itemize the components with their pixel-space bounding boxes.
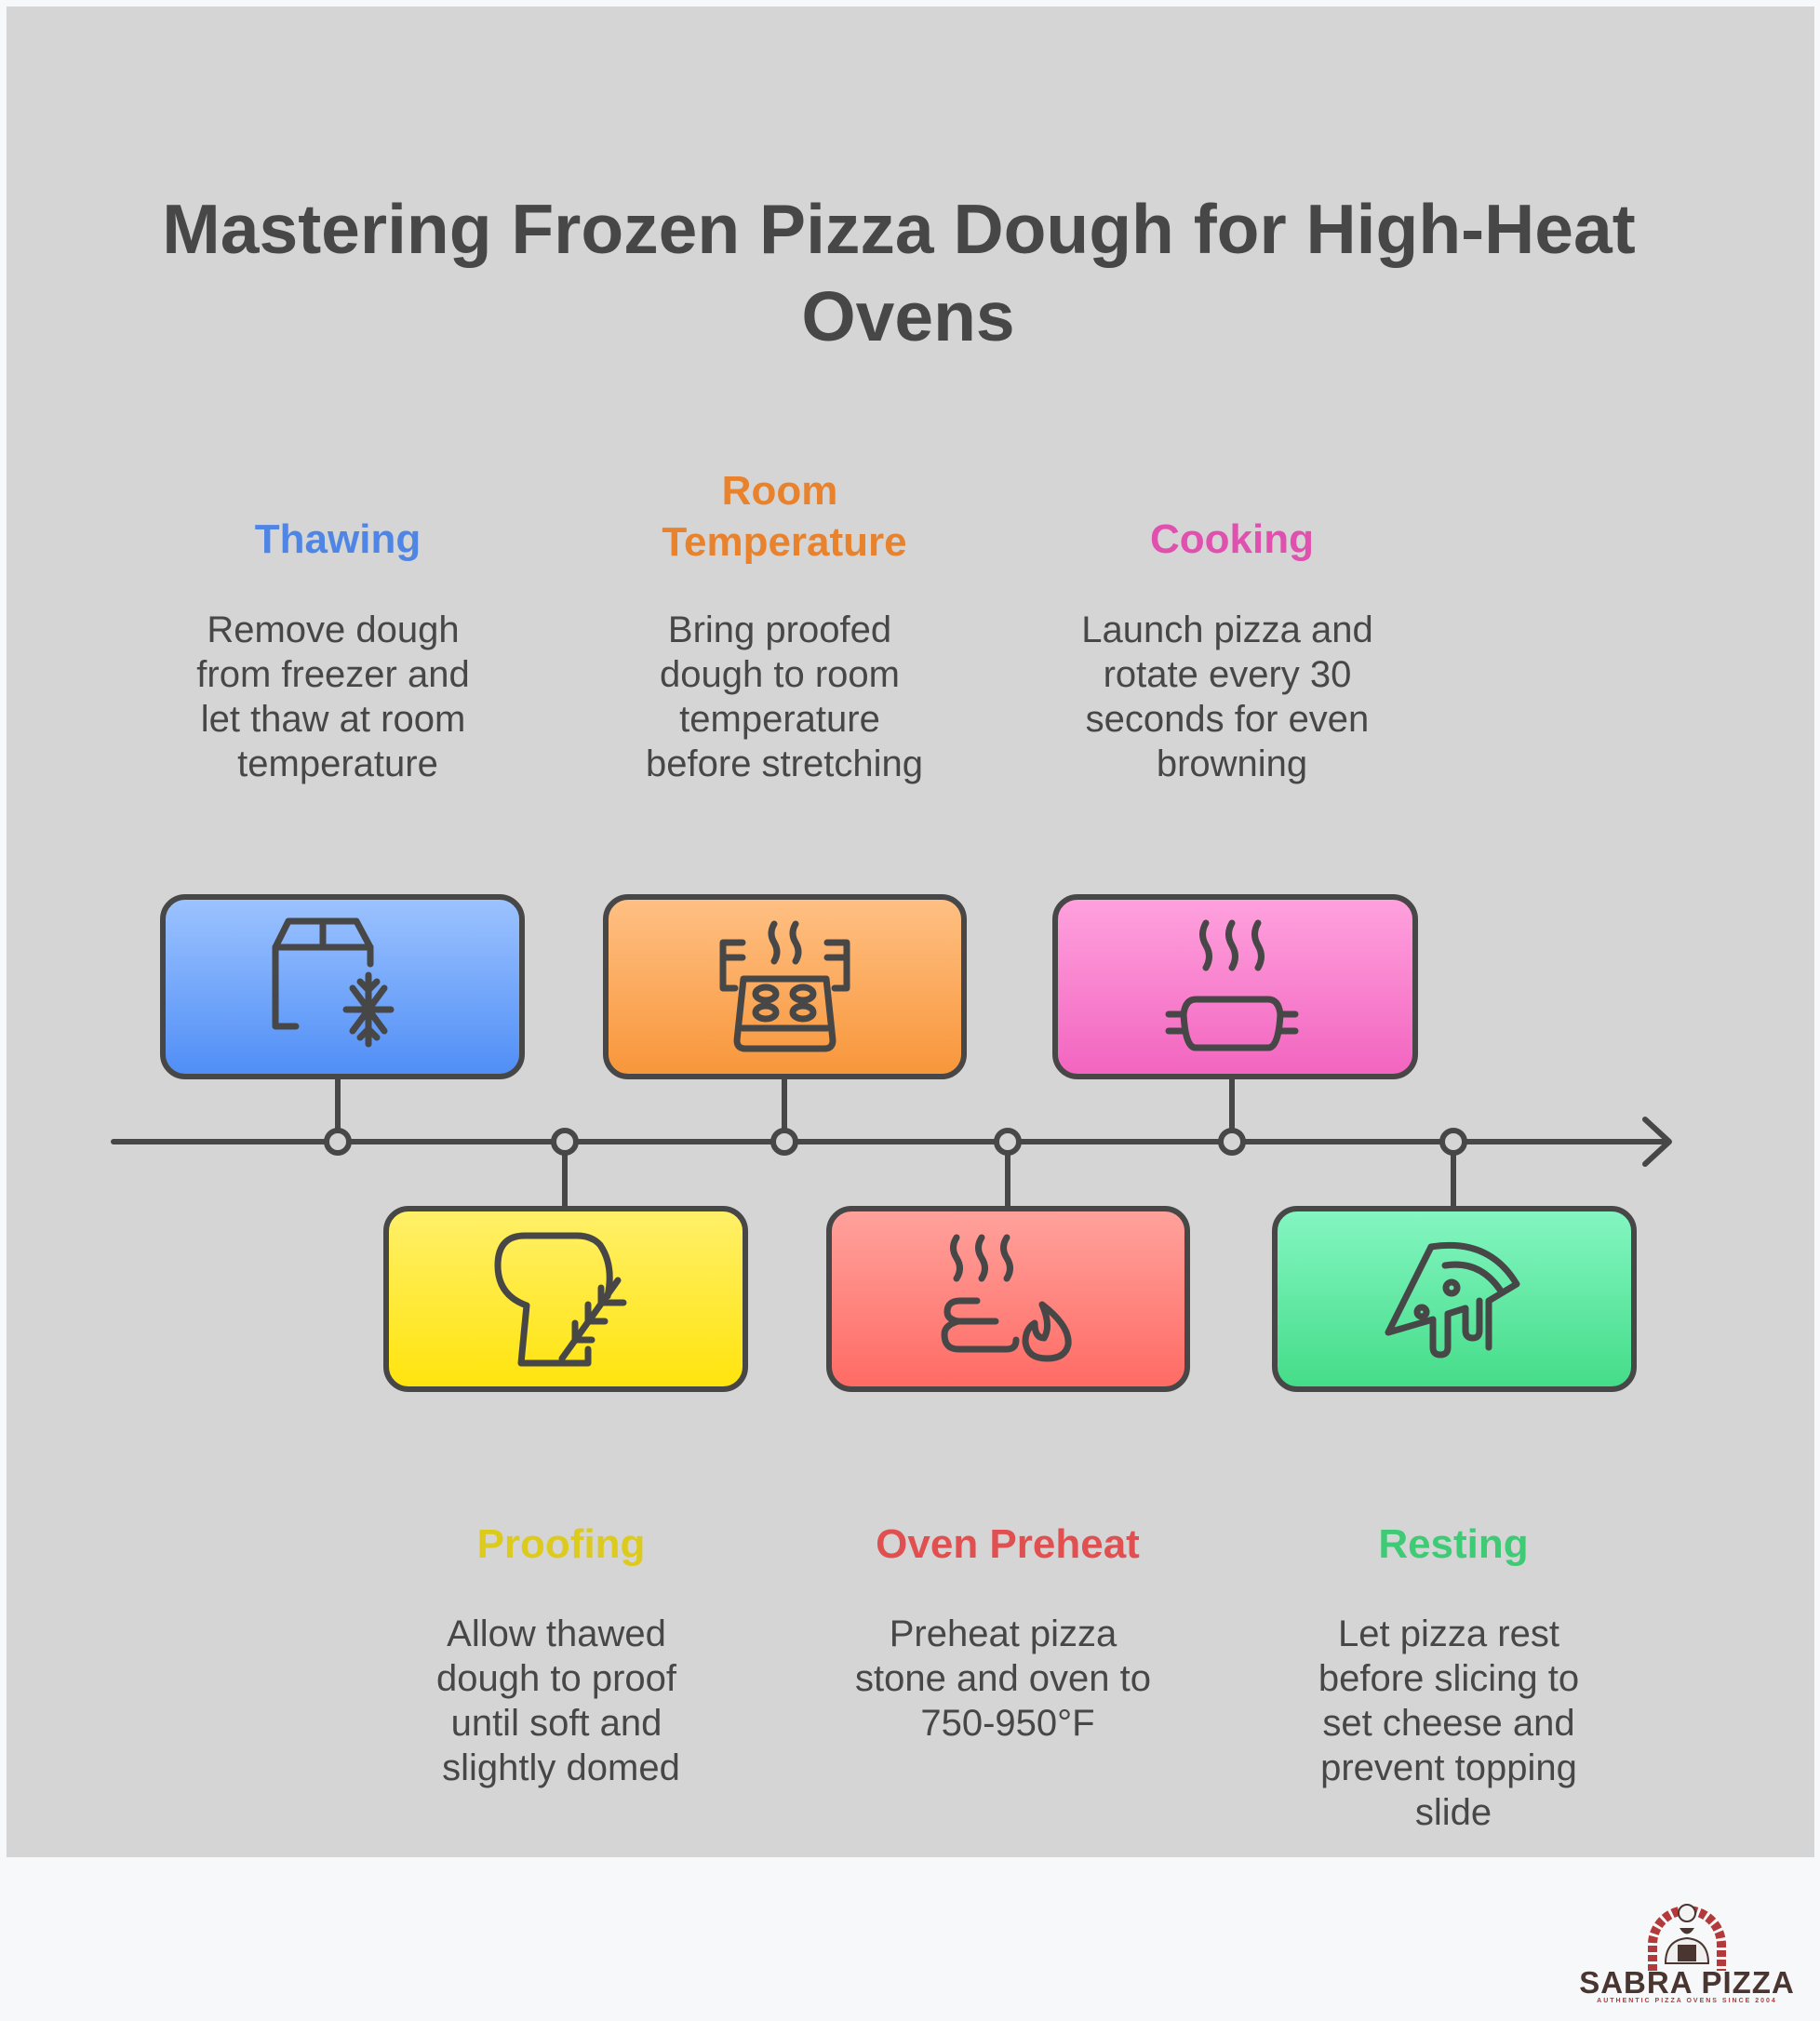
step: Proofing: until soft and [451, 1703, 662, 1744]
step: Room Temperature: Room [722, 468, 837, 514]
step: Proofing: Proofing [477, 1521, 645, 1567]
step: Cooking: rotate every 30 [1104, 654, 1351, 695]
timeline arrow [114, 1077, 1669, 1209]
step: Resting: slide [1415, 1792, 1492, 1833]
step: Thawing: let thaw at room [201, 699, 465, 740]
step: Oven Preheat [829, 1209, 1187, 1744]
step: Cooking: browning [1157, 743, 1307, 784]
icon: box with snowflake [275, 921, 391, 1044]
step: Room Temperature: Bring proofed [668, 609, 891, 650]
step: Room Temperature: before stretching [646, 743, 923, 784]
step: Cooking: Launch pizza and [1081, 609, 1373, 650]
step: Proofing: dough to proof [436, 1658, 677, 1699]
step: Room Temperature: temperature [679, 699, 880, 740]
step: Resting [1275, 1209, 1634, 1833]
step: Resting: before slicing to [1318, 1658, 1579, 1699]
step: Resting: Resting [1378, 1521, 1529, 1567]
step: Thawing: Remove dough [207, 609, 460, 650]
step: Oven Preheat: 750-950°F [920, 1703, 1095, 1744]
step: Resting: Let pizza rest [1338, 1613, 1559, 1654]
step: Proofing: Allow thawed [447, 1613, 666, 1654]
step: Oven Preheat: Preheat pizza [890, 1613, 1117, 1654]
title [162, 190, 1636, 355]
step: Thawing: from freezer and [196, 654, 470, 695]
logo: Sabra Pizza [1579, 1905, 1795, 2004]
logo: Sabra Pizza: SABRA PIZZA [1579, 1965, 1795, 2000]
title: Mastering Frozen Pizza Dough for High-Heat [162, 190, 1636, 268]
step: Thawing: Thawing [255, 516, 421, 562]
icon: steaming dish [1169, 923, 1295, 1048]
step: Oven Preheat: stone and oven to [855, 1658, 1151, 1699]
step: Thawing: temperature [237, 743, 438, 784]
step: Room Temperature [606, 468, 964, 1077]
icon: pizza slice [1388, 1245, 1517, 1355]
step: Proofing: slightly domed [442, 1747, 680, 1788]
title: Ovens [801, 277, 1015, 355]
step: Thawing [163, 516, 522, 1077]
step: Cooking [1055, 516, 1415, 1077]
step: Room Temperature: Temperature [662, 519, 907, 565]
logo: Sabra Pizza: AUTHENTIC PIZZA OVENS SINCE 2004 [1597, 1998, 1777, 2004]
icon: bread with sprig [498, 1236, 623, 1363]
step: Room Temperature: dough to room [660, 654, 900, 695]
step: Oven Preheat: Oven Preheat [876, 1521, 1140, 1567]
step: Cooking: Cooking [1150, 516, 1314, 562]
step: Resting: set cheese and [1322, 1703, 1575, 1744]
step: Resting: prevent topping [1320, 1747, 1577, 1788]
icon: oven tray [723, 924, 847, 1049]
step: Proofing [386, 1209, 745, 1788]
icon: steam dough flame [944, 1238, 1068, 1358]
step: Cooking: seconds for even [1086, 699, 1369, 740]
